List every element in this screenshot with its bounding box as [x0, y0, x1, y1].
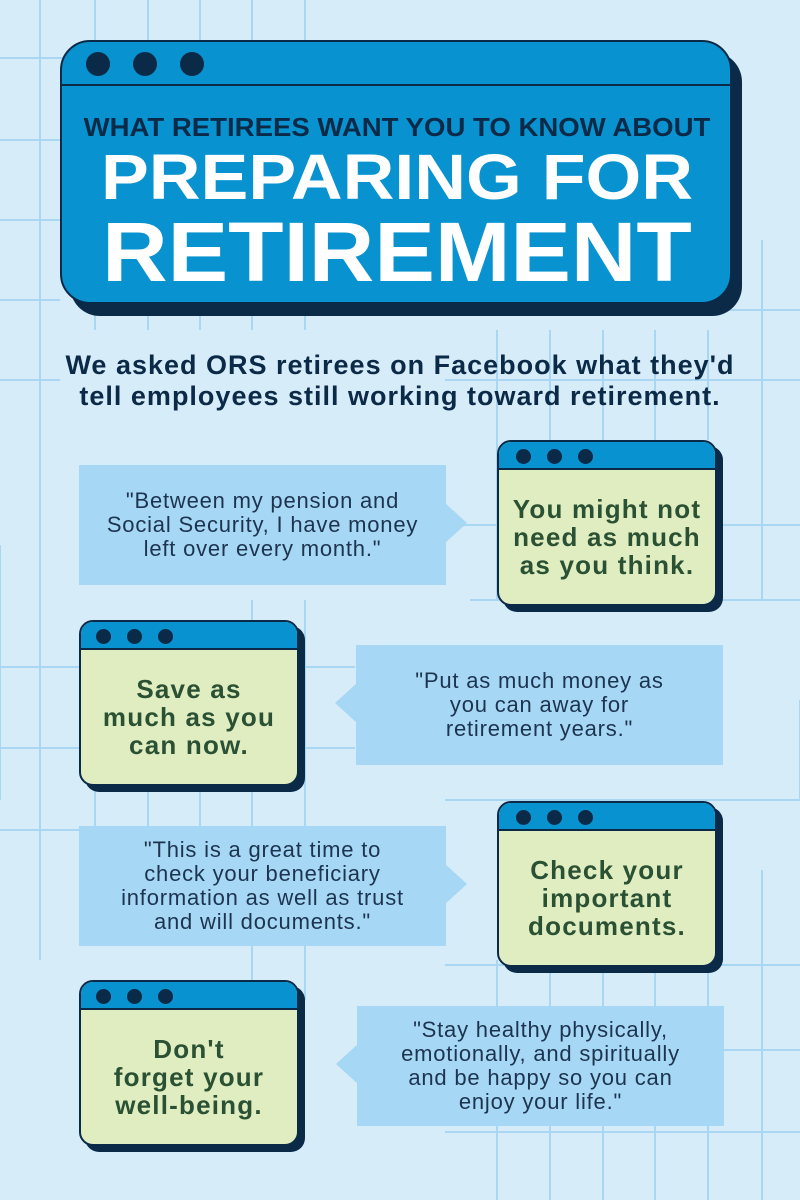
window 4: forget your [114, 1062, 264, 1092]
window 1 [497, 440, 723, 612]
window 1: as you think. [520, 550, 694, 580]
window 3: documents. [528, 911, 686, 941]
window 3 [497, 801, 723, 973]
quote 2 [356, 645, 723, 765]
window 2: Save as [136, 674, 242, 704]
window 1: need as much [513, 522, 701, 552]
window 2: can now. [129, 730, 249, 760]
title kicker: WHAT RETIREES WANT YOU TO KNOW ABOUT [84, 112, 710, 142]
header window: RETIREMENT [102, 205, 692, 299]
quote 1 [79, 465, 446, 585]
quote 4: and be happy so you can [408, 1065, 673, 1090]
quote 3: information as well as trust [121, 885, 404, 910]
window 2: much as you [103, 702, 275, 732]
window 4: well-being. [115, 1090, 263, 1120]
window 4 [79, 980, 305, 1152]
quote 3 [79, 826, 446, 946]
quote 1: left over every month." [144, 536, 381, 561]
subtitle [65, 350, 735, 411]
quote 4 [357, 1006, 724, 1126]
header dots [62, 42, 732, 86]
header window [60, 40, 742, 316]
quote 4: enjoy your life." [459, 1089, 622, 1114]
quote 3: "This is a great time to [144, 837, 381, 862]
window 2 [79, 620, 305, 792]
quote 2: retirement years." [446, 716, 633, 741]
quote 2: you can away for [450, 692, 629, 717]
window 3: important [542, 883, 672, 913]
quote 3: check your beneficiary [144, 861, 381, 886]
quote 3: and will documents." [154, 909, 371, 934]
window 1: You might not [513, 494, 701, 524]
subtitle: We asked ORS retirees on Facebook what they'd [65, 350, 735, 380]
window 3: Check your [530, 855, 684, 885]
window 4: Don't [153, 1034, 225, 1064]
quote 4: emotionally, and spiritually [401, 1041, 680, 1066]
quote 1: Social Security, I have money [107, 512, 418, 537]
quote 2: "Put as much money as [415, 668, 664, 693]
quote 4: "Stay healthy physically, [413, 1017, 668, 1042]
subtitle: tell employees still working toward retirement. [79, 381, 721, 411]
main title: PREPARING FOR [101, 141, 693, 213]
quote 1: "Between my pension and [126, 488, 399, 513]
